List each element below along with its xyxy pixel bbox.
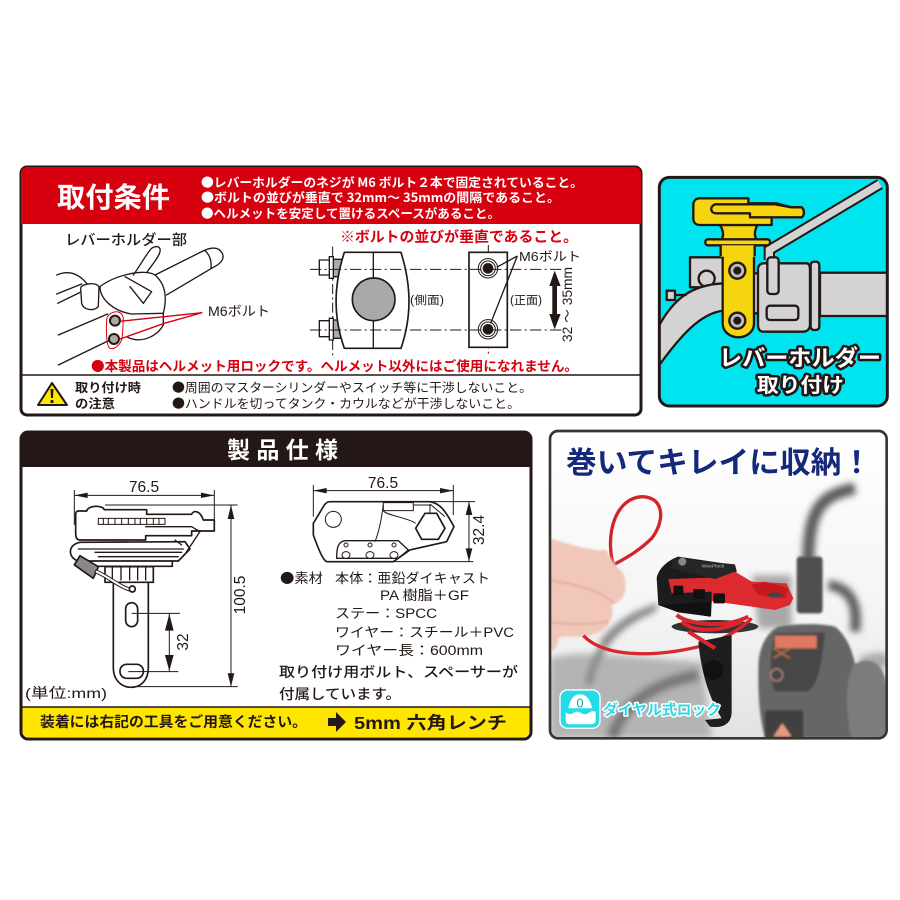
note: bolts and spacers included [279,664,518,702]
panel: tidy storage photo [550,431,888,742]
icon: caution triangle [38,383,67,405]
requirement list: ●レバーホルダーのネジが M6 ボルト２本で固定されていること。 [201,172,583,191]
hand [550,538,626,652]
material specifications [280,567,514,658]
panel: mounting conditions [21,167,641,415]
label: side view: (側面) [410,294,444,307]
label: front view: (正面) [510,295,542,307]
heading: mounting conditions: 取付条件 [57,182,170,213]
label: lever holder: レバーホルダー [719,345,881,371]
icon: dial lock badge: 0 [576,697,584,711]
caution list [172,377,532,412]
dimension: height 100.5: 100.5 [232,576,249,614]
caution list: ●周囲のマスターシリンダーやスイッチ等に干渉しないこと。 [172,377,532,396]
caution list: ●ハンドルを切ってタンク・カウルなどが干渉しないこと。 [172,393,520,412]
warning: helmet lock only: ●本製品はヘルメット用ロックです。ヘルメット以外にはご使用になれません。 [91,355,578,375]
dimension: width 76.5 side: 76.5 [129,479,159,496]
illustration: handlebar with M6 bolts [57,247,223,365]
requirement list: ●ボルトの並びが垂直で 32mm～ 35mmの間隔であること。 [201,187,560,206]
material specifications: PA 樹脂＋GF [380,588,469,603]
black header band [21,432,531,467]
bracket collar [672,620,758,633]
heading: product specifications: 製品仕様 [227,437,338,463]
lock body [657,557,737,617]
label: installation cautions [75,380,142,411]
diagram: side view with dimensions [70,490,238,687]
lower wire [583,618,752,654]
tool requirement bar [21,707,531,737]
note: bolts and spacers included: 付属しています。 [279,686,401,702]
illustration: handlebar and lever [659,184,890,365]
requirement list: ●ヘルメットを安定して置けるスペースがあること。 [201,203,500,222]
diagram: side and front view of clamp [310,245,562,357]
material specifications: ステー：SPCC [335,606,437,621]
wire coil [677,615,748,648]
label: mounting: 取り付け [757,374,844,397]
photo heading: 巻いてキレイに収納！ [566,447,872,480]
panel: lever holder mounting icon [659,177,890,406]
label: M6 bolt: M6ボルト [208,304,270,319]
panel: product specifications [21,432,531,739]
label: dial type lock: ダイヤル式ロック [603,701,721,719]
material specifications: ワイヤー：スチール＋PVC [335,625,514,640]
diagram: top view with dimensions [313,485,475,562]
red header band [21,167,641,224]
icon: dial lock badge [560,690,600,728]
dimension: 32 to 35 mm: 32 ～ 35mm [560,267,575,342]
photo: wire lock on motorcycle handlebar [550,488,888,742]
tool note: 装着には右記の工具をご用意ください。 [40,713,307,731]
dimension: width 76.5 top: 76.5 [368,475,398,492]
label: M6 bolt front: M6ボルト [519,249,581,264]
material specifications: ワイヤー長：600mm [335,643,483,658]
dimension: bolt pitch 32: 32 [175,633,192,651]
tool name: 5mm 六角レンチ [354,713,507,733]
label: installation cautions: 取り付け時 [75,380,142,395]
note: bolts and spacers included: 取り付け用ボルト、スペーサーが [279,664,518,680]
bracket stem [698,635,732,727]
note: bolts must be vertical: ※ボルトの並びが垂直であること。 [340,228,578,246]
red wire loop [610,497,661,565]
photo: wire lock on motorcycle handlebar: WirePlock [702,564,725,570]
requirement list [201,172,583,222]
icon: arrow [328,712,346,732]
label: installation cautions: の注意 [75,396,116,411]
unit note: (単位:mm) [25,685,107,701]
material specifications: 本体：亜鉛ダイキャスト [335,571,490,586]
material specifications: ●素材 [280,567,323,587]
dimension: thickness 32.4: 32.4 [471,515,488,545]
label: lever holder part: レバーホルダー部 [65,231,188,249]
